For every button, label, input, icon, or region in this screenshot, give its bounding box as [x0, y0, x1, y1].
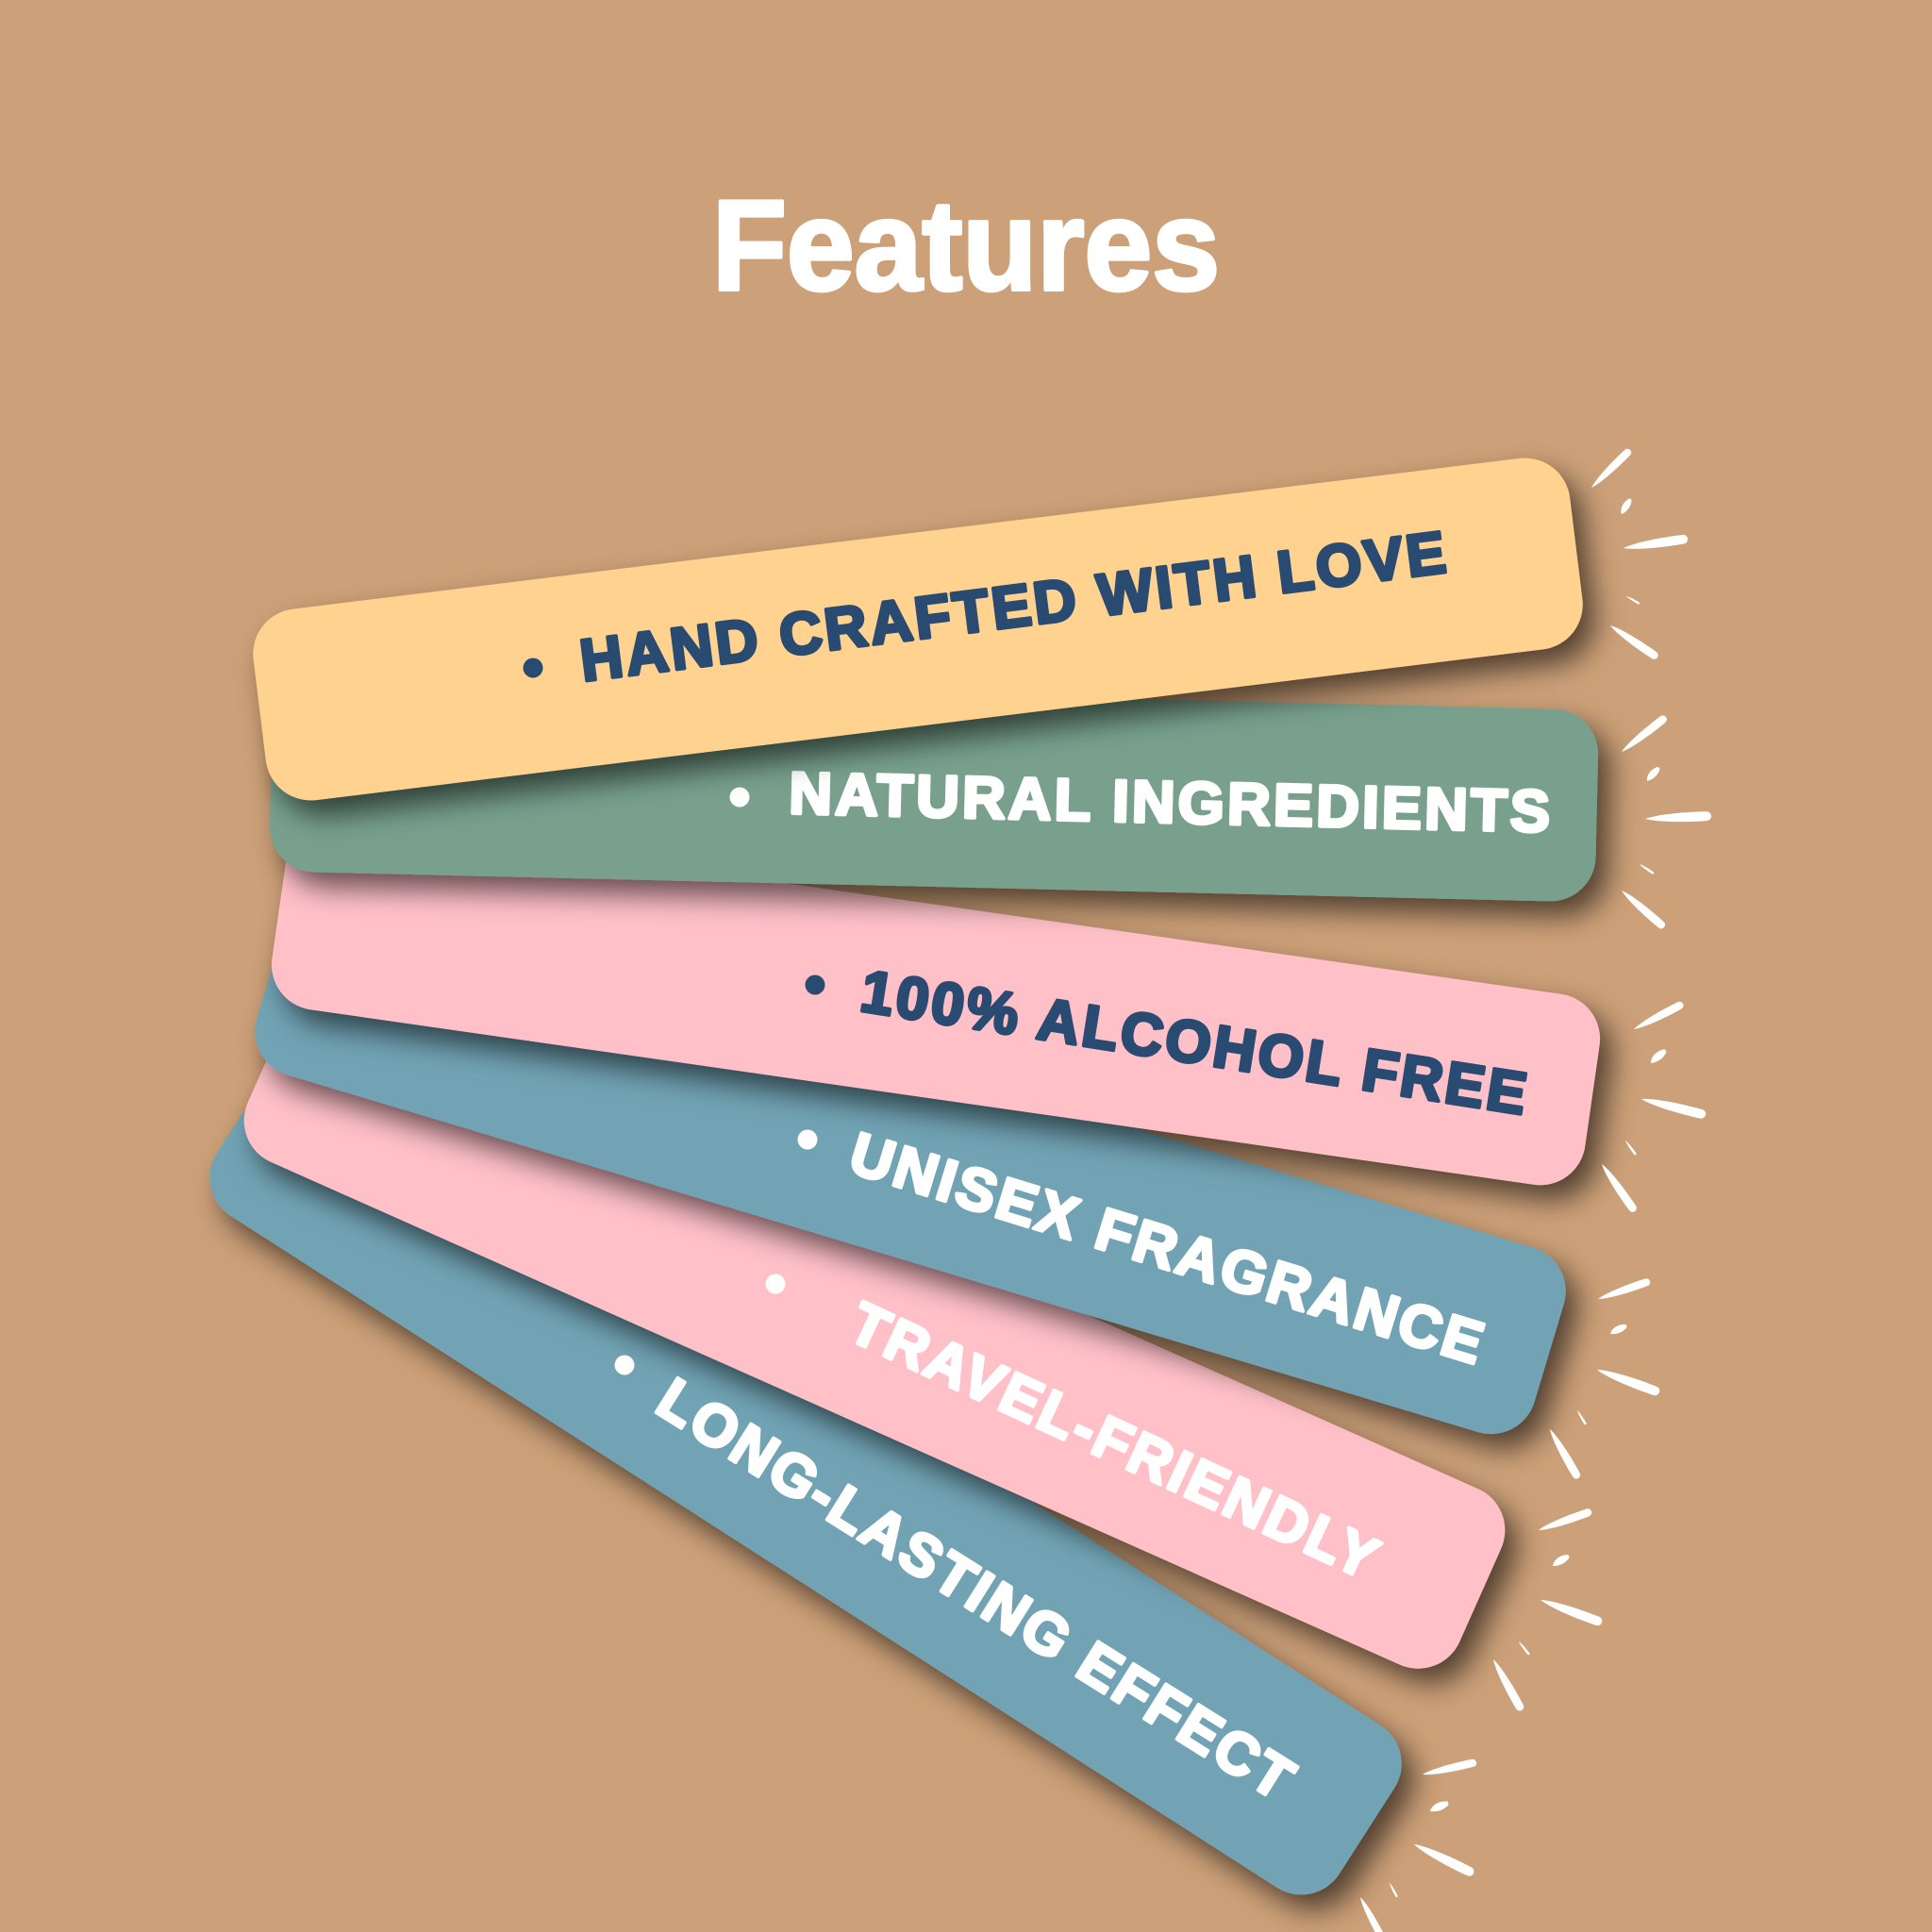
panel: unisex fragrance	[244, 877, 1576, 1445]
panel: hand crafted with love	[248, 453, 1588, 806]
icon: spark lines, strip 5	[1490, 1507, 1604, 1712]
panel: 100% alcohol free	[266, 812, 1606, 1191]
card: yellow strip 1	[248, 453, 1588, 806]
card: pink strip 5	[229, 968, 1520, 1683]
icon: spark lines, strip 3	[1598, 1000, 1707, 1214]
icon: spark lines, strip 6	[1357, 1758, 1477, 1932]
label: TRAVEL-FRIENDLY	[840, 1289, 1391, 1593]
label: LONG-LASTING EFFECT	[646, 1365, 1307, 1814]
label: NATURAL INGREDIENTS	[789, 759, 1554, 844]
label: UNISEX FRAGRANCE	[842, 1119, 1494, 1377]
card: pink strip 3	[266, 812, 1606, 1191]
icon: spark lines, strip 2	[1619, 714, 1711, 930]
label: HAND CRAFTED WITH LOVE	[576, 518, 1452, 693]
panel: natural ingredients	[269, 678, 1599, 903]
title: Features	[712, 174, 1220, 317]
icon: spark lines, strip 1	[1589, 447, 1689, 661]
bullet	[766, 1274, 785, 1294]
card: green strip 2	[269, 678, 1599, 903]
label: 100% ALCOHOL FREE	[857, 958, 1534, 1127]
bullet	[798, 1130, 817, 1149]
card: blue strip 4	[244, 877, 1576, 1445]
bullet	[806, 975, 824, 994]
bullet	[523, 658, 543, 677]
bullet	[615, 1355, 634, 1375]
card: blue strip 6	[192, 1029, 1419, 1912]
bullet	[730, 787, 749, 808]
icon: spark lines, strip 4	[1546, 1277, 1661, 1480]
panel: travel-friendly	[229, 968, 1520, 1683]
panel: long-lasting effect	[192, 1029, 1419, 1912]
